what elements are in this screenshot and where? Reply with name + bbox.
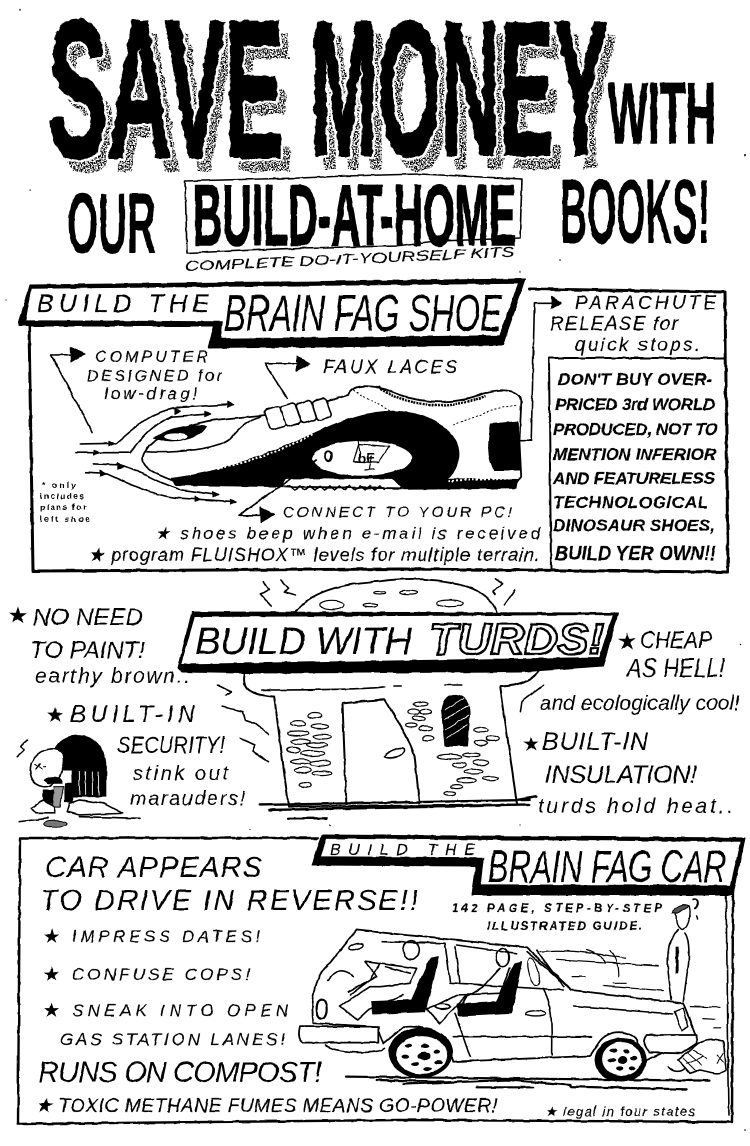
footnote: left shoe only	[40, 480, 90, 524]
divider to sidebar	[549, 358, 725, 570]
illustration: fainted marauder at doorway: X-	[33, 762, 48, 772]
tread highlight	[157, 433, 314, 472]
shoe labels: ★ program FLUISHOX™ levels for multiple terrain.	[88, 545, 540, 565]
note: toxic methane fumes: ★ TOXIC METHANE FUMES MEANS GO-POWER!	[35, 1096, 498, 1117]
heel block	[489, 422, 521, 470]
car body	[312, 930, 697, 1062]
shoe labels: ★ shoes beep when e-mail is received	[155, 524, 541, 543]
sign: build with turds: TURDS!	[429, 615, 604, 664]
footnote: left shoe only: includes	[40, 491, 84, 501]
panel frame	[18, 838, 733, 1124]
header banner: build the brain fag shoe: BRAIN FAG SHOE	[224, 285, 503, 343]
sidebar copy: AND FEATURELESS	[552, 469, 716, 488]
sidebar copy: DON'T BUY OVER-	[558, 370, 712, 389]
build-at-home box	[185, 168, 522, 264]
footnote: left shoe only: * only	[42, 480, 76, 490]
benefit: cheap as hell: and ecologically cool!	[540, 692, 740, 715]
shoe labels: CONNECT TO YOUR PC!	[283, 504, 513, 521]
bystander	[668, 899, 698, 1002]
inset screen	[312, 440, 413, 477]
benefit: built-in security: SECURITY!	[117, 732, 225, 759]
sign: build with turds	[178, 612, 618, 673]
benefit: cheap as hell: CHEAP	[640, 627, 712, 654]
benefit: built-in insulation: BUILT-IN	[542, 728, 649, 756]
compost exhaust cloud	[678, 1039, 727, 1073]
bumpers	[299, 1027, 378, 1043]
tagline: complete do-it-yourself kits: COMPLETE DO-IT-YOURSELF KITS	[184, 244, 516, 274]
subtitle: our build-at-home books	[67, 161, 710, 272]
headline: runs on compost: RUNS ON COMPOST!	[38, 1057, 322, 1089]
shoe upper	[143, 386, 521, 488]
benefit: built-in security: marauders!	[130, 788, 245, 810]
turd blobs	[287, 591, 500, 795]
seats	[372, 957, 438, 1014]
headline: car appears to drive in reverse: TO DRIVE IN REVERSE!!	[40, 885, 418, 917]
speed lines	[540, 950, 721, 1028]
arrow: connect to pc	[238, 460, 316, 523]
benefit: no need to paint: NO NEED	[33, 604, 143, 631]
shoe labels: DESIGNED for	[87, 368, 223, 385]
stink squiggles	[217, 578, 544, 762]
toe swoosh	[145, 417, 261, 452]
feature list: SNEAK INTO OPEN	[72, 1001, 289, 1020]
benefit: built-in security: stink out	[133, 763, 229, 785]
benefit: built-in security: ★	[47, 705, 64, 725]
shoe labels: FAUX LACES	[323, 357, 457, 377]
shoe labels: low-drag!	[104, 384, 197, 403]
header banner: build the brain fag car: BUILD THE	[330, 842, 475, 859]
note: illustrated guide: 142 PAGE, STEP-BY-STEP	[452, 903, 662, 915]
feature list	[44, 927, 289, 1049]
door	[342, 699, 419, 803]
feature list: ★	[44, 1001, 60, 1020]
dome	[293, 579, 498, 615]
header banner: build the brain fag shoe: BUILD THE	[37, 290, 209, 318]
window	[442, 695, 470, 746]
benefit: built-in security	[47, 701, 245, 810]
benefit: built-in security: BUILT-IN	[70, 701, 196, 728]
illustration: shoe: bF	[358, 451, 375, 466]
sidebar copy: DINOSAUR SHOES,	[553, 516, 715, 535]
arrow: parachute release	[519, 297, 561, 441]
parachute note: PARACHUTE	[575, 293, 716, 314]
driver figures	[340, 941, 510, 1023]
road	[346, 1077, 710, 1089]
laces	[264, 398, 332, 430]
benefit: no need to paint	[9, 604, 190, 688]
benefit: built-in insulation: ★	[523, 734, 540, 754]
benefit: cheap as hell: AS HELL!	[625, 653, 725, 683]
shoe labels	[87, 349, 541, 565]
sign: build with turds: BUILD WITH	[195, 621, 413, 663]
feature list: CONFUSE COPS!	[72, 965, 250, 984]
house body	[244, 668, 540, 807]
benefit: built-in insulation: turds hold heat..	[538, 795, 733, 818]
benefit: built-in insulation	[523, 728, 733, 818]
panel: build with turds	[9, 578, 740, 827]
headline: car appears to drive in reverse	[40, 852, 418, 917]
sidebar copy: TECHNOLOGICAL	[553, 493, 708, 512]
panel: brain fag car	[18, 835, 745, 1124]
note: illustrated guide	[452, 903, 662, 933]
benefit: cheap as hell: ★	[618, 631, 636, 653]
sidebar copy: MENTION INFERIOR	[553, 445, 717, 464]
arrow: computer designed	[51, 347, 92, 432]
windows	[328, 942, 572, 990]
illustration: fainted marauder at doorway	[17, 736, 139, 827]
arrow: faux laces	[265, 356, 310, 398]
footnote: left shoe only: left shoe	[40, 514, 90, 524]
black sole swoosh	[171, 411, 518, 489]
benefit: no need to paint: earthy brown..	[35, 665, 190, 688]
illustration: shoe	[51, 297, 561, 523]
sidebar copy: PRODUCED, NOT TO	[553, 420, 718, 439]
benefit: built-in insulation: INSULATION!	[545, 761, 697, 789]
parachute note: quick stops.	[575, 335, 700, 356]
headline: car appears to drive in reverse: CAR APPEARS	[45, 852, 263, 884]
panel: brain fag shoe	[19, 279, 728, 572]
feature list: GAS STATION LANES!	[60, 1030, 285, 1049]
subtitle: our build-at-home books: OUR	[67, 176, 156, 272]
parachute note: RELEASE for	[550, 314, 679, 335]
wheels	[389, 1027, 647, 1082]
header banner: build the brain fag shoe	[19, 279, 525, 348]
panel frame	[29, 289, 728, 572]
sidebar copy: BUILD YER OWN!!	[555, 543, 716, 565]
sidebar copy	[552, 370, 718, 565]
doors and trim	[453, 988, 673, 1057]
note: legal in four states: ★ legal in four states	[545, 1104, 696, 1119]
airflow lines	[76, 404, 236, 502]
sidebar copy: PRICED 3rd WORLD	[555, 395, 715, 414]
benefit: no need to paint: TO PAINT!	[30, 637, 145, 664]
ground	[260, 797, 536, 818]
parachute note	[550, 293, 716, 356]
footnote: left shoe only: plans for	[40, 502, 87, 512]
feature list: IMPRESS DATES!	[72, 927, 260, 946]
benefit: no need to paint: ★	[9, 605, 27, 627]
header banner: build the brain fag car	[312, 835, 745, 895]
benefit: cheap as hell	[540, 627, 740, 715]
tread teeth	[290, 486, 385, 490]
illustration: turd house	[217, 578, 544, 818]
shoe labels: COMPUTER	[95, 349, 208, 366]
feature list: ★	[44, 927, 60, 946]
illustration: car	[299, 899, 727, 1089]
feature list: ★	[44, 965, 60, 984]
note: illustrated guide: ILLUSTRATED GUIDE.	[487, 921, 642, 933]
